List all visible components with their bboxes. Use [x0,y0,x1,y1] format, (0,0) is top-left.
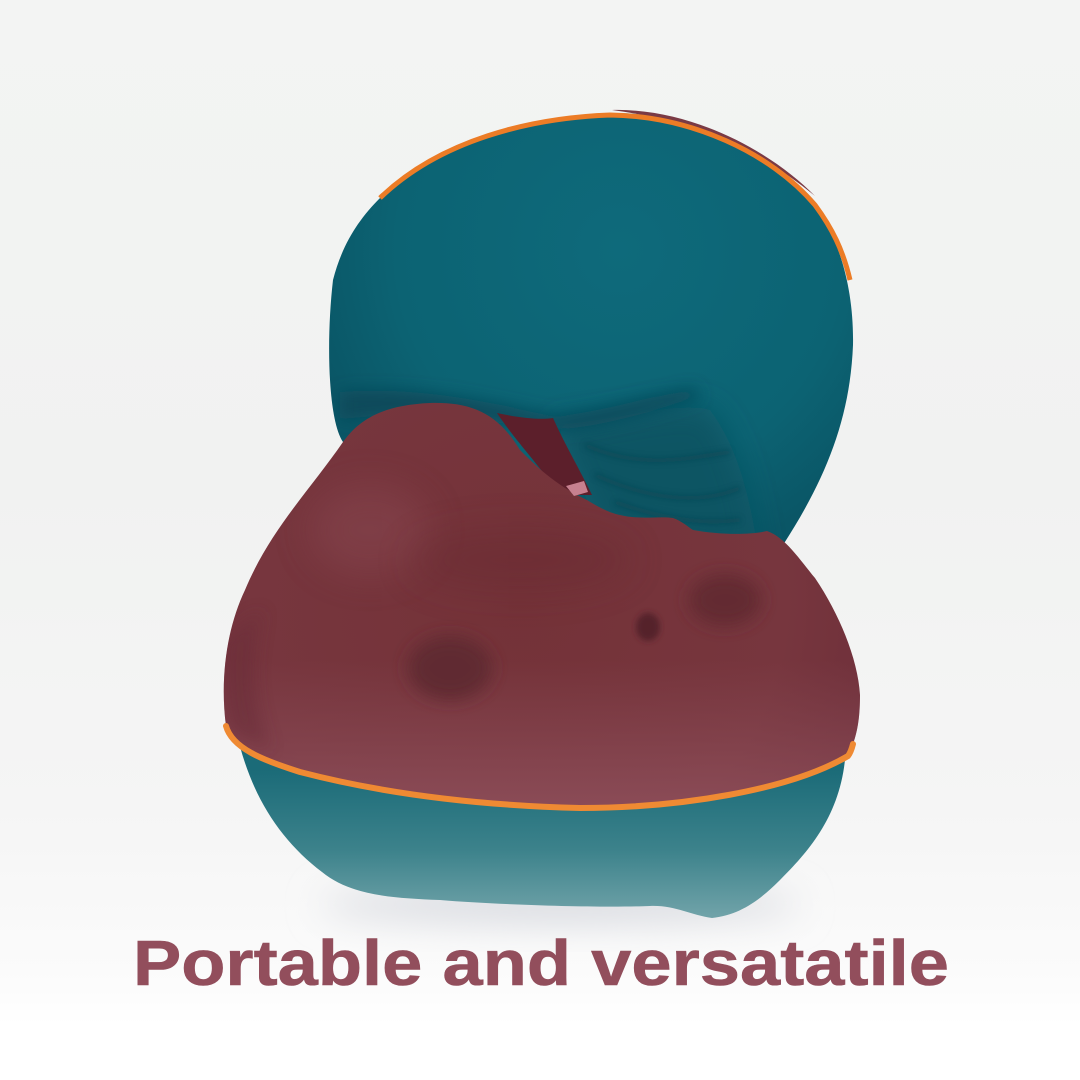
under-lobe shadow [340,388,700,430]
caption: Portable and versatatile [133,927,949,999]
pillow: upper teal lobe [329,110,853,580]
cushion shadow [320,887,800,923]
velvet mottling [408,636,492,700]
pillow: bottom teal base [236,730,846,918]
pillow: maroon body [210,395,870,815]
fabric creases [590,446,735,510]
orange piping bottom [226,726,853,808]
dark inner fold of the lobe [564,408,736,518]
lighter lower band [224,706,860,805]
inner crease backing [497,413,592,495]
orange piping top [380,115,850,280]
stitch detail [566,481,588,496]
maroon sliver at top [612,110,815,196]
